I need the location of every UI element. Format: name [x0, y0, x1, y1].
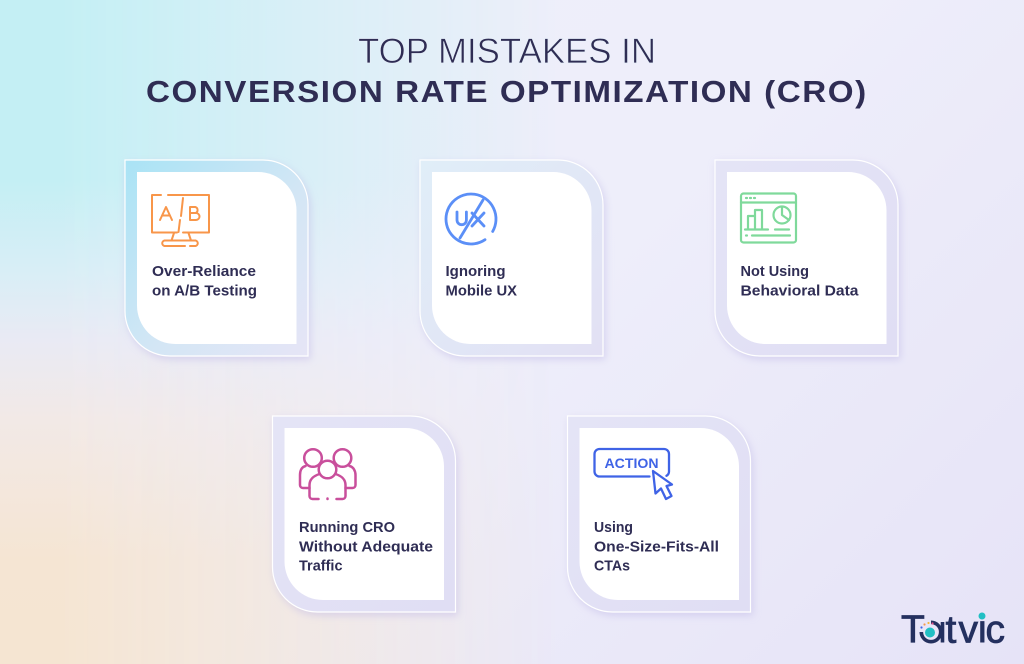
title	[146, 32, 866, 109]
title: CONVERSION RATE OPTIMIZATION (CRO)	[146, 74, 866, 109]
text: label: on A/B Testing	[152, 282, 257, 300]
text: label: Using	[594, 519, 633, 536]
panel: ignoring mobile UX	[420, 160, 603, 356]
text: label: Running CRO	[299, 519, 395, 536]
icon: crossed-out UX	[446, 194, 496, 244]
text: label: One-Size-Fits-All	[594, 538, 719, 556]
panel: over-reliance on A/B testing	[125, 160, 308, 356]
text: label: Without Adequate	[299, 538, 433, 556]
panel: running CRO without adequate traffic	[272, 416, 456, 612]
icon: analytics dashboard	[741, 194, 796, 242]
text: label: Not Using	[740, 263, 809, 280]
title: TOP MISTAKES IN	[358, 32, 656, 71]
text: label: Traffic	[299, 558, 342, 574]
panel: not using behavioral data	[715, 160, 898, 356]
icon: action button with cursor: ACTION	[604, 455, 658, 471]
logo: Tatvic: Tatvic	[901, 608, 1005, 652]
text: label: Over-Reliance	[152, 263, 256, 280]
text: label: Behavioral Data	[740, 282, 859, 300]
text: label: CTAs	[594, 558, 630, 574]
icon: action button with cursor	[594, 449, 672, 499]
text: label: Ignoring	[446, 263, 506, 280]
text: label: Mobile UX	[446, 282, 517, 300]
icon: A/B monitor	[152, 195, 209, 246]
icon: group of people	[300, 449, 356, 499]
panel: using one-size-fits-all CTAs	[568, 416, 750, 612]
